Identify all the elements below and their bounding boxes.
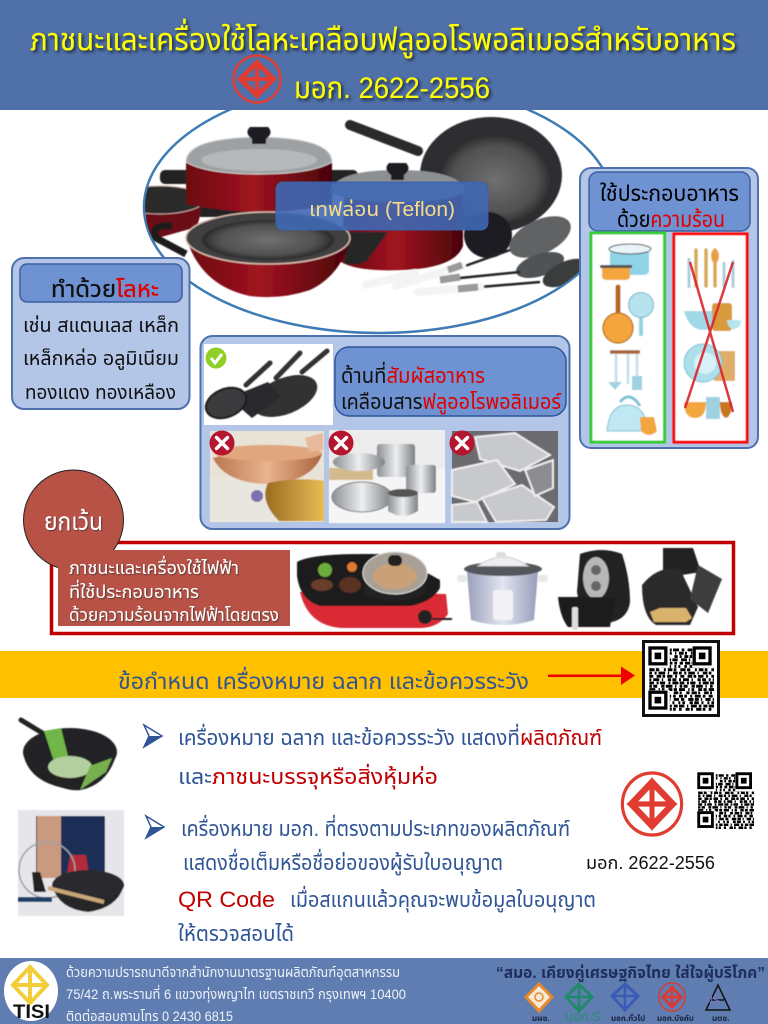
icon: bullet arrow (144, 725, 162, 747)
label: teflon: เทฟล่อน (Teflon) (309, 198, 455, 221)
icon: large frying pan (350, 117, 562, 233)
label: teflon (276, 182, 488, 230)
bullet 2 (146, 814, 596, 946)
panel: exceptions (24, 470, 734, 634)
box: allowed cookware (591, 233, 664, 442)
text box: electric appliances: ที่ใช้ประกอบอาหาร (69, 579, 199, 602)
icon: bullet arrow (146, 816, 164, 838)
slogan: “สมอ. เคียงคู่เศรษฐกิจไทย ใส่ใจผู้บริโภค” (496, 964, 765, 983)
bullet 1: และภาชนะบรรจุหรือสิ่งหุ้มห่อ (178, 763, 438, 790)
logo: TISI: TISI (13, 1002, 50, 1023)
standard number: มอก. 2622-2556 (586, 853, 715, 873)
icon: TISI red mark (622, 773, 682, 835)
text box: electric appliances (58, 550, 290, 626)
footer (0, 958, 768, 1024)
illustration: teflon cookware in oval (142, 110, 604, 334)
image: copper and gold woks (210, 430, 324, 522)
image: electric grill (297, 552, 452, 628)
band: requirements heading: ข้อกำหนด เครื่องหมาย ฉลาก และข้อควรระวัง (118, 666, 529, 694)
panel heading: ด้วยความร้อน (617, 207, 725, 232)
panel heading: ใช้ประกอบอาหาร (600, 181, 739, 206)
badge: exception oval: ยกเว้น (44, 508, 103, 536)
icon: left pan (145, 185, 250, 240)
logos: standard marks: มอก.ทั่วไป (611, 1012, 645, 1023)
image: foil trays (450, 430, 558, 522)
logos: standard marks: NS (705, 995, 720, 1007)
text: metal types: เช่น สแตนเลส เหล็ก (23, 314, 179, 337)
text: เครื่องหมาย มอก. ที่ตรงตามประเภทของผลิตภัณฑ์ (181, 814, 570, 841)
text: contact: 75/42 ถ.พระรามที่ 6 แขวงทุ่งพญาไท เขตราชเทวี กรุงเทพฯ 10400 (66, 984, 406, 1003)
panel: heat cooking (580, 168, 758, 448)
logo: TISI (4, 961, 58, 1023)
panel: made of metal (12, 258, 190, 409)
title line 2: มอก. 2622-2556 (294, 72, 490, 105)
image: boxed wok (18, 810, 124, 916)
logos: standard marks: มผช. (532, 1014, 550, 1023)
bullet 1 (144, 723, 602, 790)
panel heading (20, 264, 182, 302)
callout: coating: ด้านที่สัมผัสอาหาร (341, 361, 485, 388)
image: non-stick pans (201, 344, 333, 425)
logos: standard marks: มตช. (712, 1014, 729, 1023)
logos: standard marks: มอก.บังคับ (657, 1013, 694, 1023)
box: not allowed utensils (674, 234, 747, 442)
image: air fryer (558, 550, 630, 630)
image: stainless cookware (328, 430, 445, 523)
bullet 2: แสดงชื่อเต็มหรือชื่อย่อของผู้รับใบอนุญาต (183, 848, 503, 876)
image: rice cooker (457, 552, 548, 625)
text: contact (66, 964, 406, 1024)
qr code (643, 641, 719, 716)
arrow (548, 666, 635, 685)
text: contact: ติดต่อสอบถามโทร 0 2430 6815 (66, 1008, 233, 1024)
logos: standard marks: มอก.S (565, 1009, 601, 1024)
bullet 2: ให้ตรวจสอบได้ (178, 922, 294, 946)
bullet 2: QR Code (178, 887, 275, 912)
logos: standard marks (526, 983, 730, 1024)
icon: TISI mark (233, 55, 281, 103)
text: metal types: ทองแดง ทองเหลือง (25, 382, 176, 404)
title line 1: ภาชนะและเครื่องใช้โลหะเคลือบฟลูออโรพอลิเมอร์สำหรับอาหาร (30, 18, 736, 58)
exception frame (52, 542, 734, 634)
icon: red wok (155, 212, 388, 297)
text box: electric appliances: ภาชนะและเครื่องใช้ไฟฟ้า (69, 555, 239, 578)
callout: coating: เคลือบสารฟลูออโรพอลิเมอร์ (341, 391, 562, 415)
icon: check (206, 348, 226, 368)
panel heading (589, 172, 750, 232)
text: เครื่องหมาย ฉลาก และข้อควรระวัง แสดงที่ผลิตภัณฑ์ (178, 723, 602, 750)
text: contact: ด้วยความปรารถนาดีจากสำนักงานมาตรฐานผลิตภัณฑ์อุตสาหกรรม (66, 964, 400, 981)
badge: exception oval (24, 470, 124, 570)
bullet 2: เมื่อสแกนแล้วคุณจะพบข้อมูลใบอนุญาต (290, 885, 596, 913)
text box: electric appliances: ด้วยความร้อนจากไฟฟ้าโดยตรง (69, 605, 279, 625)
image: wok with label (21, 720, 117, 790)
panel heading: ทำด้วยโลหะ (51, 276, 159, 302)
text: metal types: เหล็กหล่อ อลูมิเนียม (23, 347, 179, 371)
icon: second red pot (330, 163, 466, 270)
image: sandwich maker (642, 548, 722, 625)
header band (0, 0, 768, 110)
qr code small (697, 772, 754, 830)
text: metal types (23, 314, 179, 404)
callout: coating (335, 347, 566, 416)
band: requirements heading (0, 651, 768, 698)
icon: utensils (366, 208, 591, 293)
icon: big red pot with lid (160, 127, 358, 212)
panel: food contact surface (200, 336, 570, 529)
